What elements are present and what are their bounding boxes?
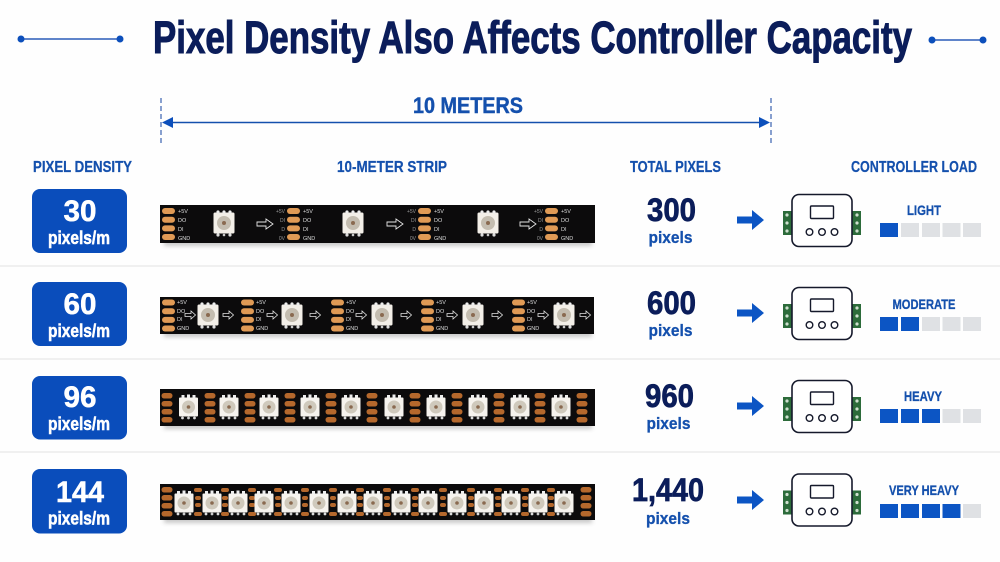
soft shadows under strips [164, 238, 592, 523]
load meter: moderate: MODERATE [892, 297, 956, 312]
LED strip: 60 pixels/m: DI [256, 317, 262, 323]
LED strip: 60 pixels/m: DO [527, 309, 536, 315]
total pixels: 600: 600 [647, 285, 696, 321]
LED strip: 60 pixels/m: DI [527, 317, 533, 323]
badge: 96 pixels/m: pixels/m [48, 414, 110, 434]
total pixels: 600: pixels [648, 321, 692, 340]
LED strip: 60 pixels/m [160, 297, 594, 334]
LED strip: 60 pixels/m: +5V [256, 300, 266, 306]
LED strip: 30 pixels/m: +5V [434, 209, 444, 215]
load meter: moderate [880, 297, 981, 331]
LED strip: 60 pixels/m: DO [177, 309, 186, 315]
load meter: light: LIGHT [907, 203, 942, 218]
LED strip: 96 pixels/m [160, 389, 595, 426]
LED strip: 60 pixels/m: GND [346, 326, 358, 332]
badge: 96 pixels/m: 96 [64, 381, 96, 414]
LED strip: 30 pixels/m: DI [538, 218, 543, 224]
load meter: heavy [880, 389, 981, 423]
badge: 30 pixels/m: 30 [64, 195, 96, 228]
total pixels: 960 [645, 378, 694, 433]
total pixels: 300: 300 [647, 192, 696, 228]
right title ornament [928, 36, 986, 44]
arrow and controller: row 2 [737, 288, 861, 340]
badge: 60 pixels/m: pixels/m [48, 321, 110, 341]
LED strip: 30 pixels/m: DI [303, 227, 309, 233]
LED strip: 30 pixels/m: D [281, 227, 285, 233]
LED strip: 30 pixels/m: +5V [276, 209, 286, 215]
LED strip: 60 pixels/m: GND [177, 326, 189, 332]
LED strip: 30 pixels/m [160, 205, 595, 243]
LED strip: 30 pixels/m: DI [280, 218, 285, 224]
LED strip: 30 pixels/m: D [412, 227, 416, 233]
badge: 60 pixels/m: 60 [64, 288, 96, 321]
10 meters dimension marker [161, 93, 771, 146]
LED strip: 30 pixels/m: DO [178, 218, 187, 224]
LED strip: 30 pixels/m: DI [561, 227, 567, 233]
arrow and controller: row 4 [737, 474, 861, 526]
LED strip: 60 pixels/m: DI [346, 317, 352, 323]
row dividers [0, 266, 1000, 452]
badge: 144 pixels/m: pixels/m [48, 508, 110, 528]
LED strip: 60 pixels/m: DO [436, 309, 445, 315]
badge: 144 pixels/m [32, 469, 127, 534]
LED strip: 144 pixels/m [160, 484, 595, 520]
left title ornament [18, 36, 124, 42]
total pixels: 960: 960 [645, 378, 694, 414]
total pixels: 300: pixels [648, 228, 692, 247]
LED strip: 60 pixels/m: +5V [346, 300, 356, 306]
load meter: heavy: HEAVY [904, 389, 942, 404]
column heading: total pixels: TOTAL PIXELS [630, 159, 721, 176]
LED strip: 30 pixels/m: D [539, 227, 543, 233]
LED strip: 30 pixels/m: +5V [178, 209, 188, 215]
LED strip: 30 pixels/m: GND [434, 236, 446, 242]
LED strip: 60 pixels/m: DI [177, 317, 183, 323]
LED strip: 60 pixels/m: +5V [177, 300, 187, 306]
LED strip: 30 pixels/m: DI [434, 227, 440, 233]
badge: 30 pixels/m: pixels/m [48, 228, 110, 248]
LED strip: 60 pixels/m: DI [436, 317, 442, 323]
badge: 96 pixels/m [32, 376, 127, 440]
LED strip: 60 pixels/m: DO [256, 309, 265, 315]
total pixels: 960: pixels [646, 414, 690, 433]
10 meters dimension marker: 10 METERS [413, 93, 523, 118]
LED strip: 60 pixels/m: +5V [436, 300, 446, 306]
LED strip: 30 pixels/m: DO [561, 218, 570, 224]
arrow and controller: row 1 [737, 194, 861, 246]
LED strip: 60 pixels/m: GND [436, 326, 448, 332]
LED strip: 30 pixels/m: GND [178, 236, 190, 242]
total pixels: 1,440: pixels [646, 509, 690, 528]
LED strip: 60 pixels/m: GND [527, 326, 539, 332]
badge: 30 pixels/m [32, 189, 127, 253]
total pixels: 300 [647, 192, 696, 247]
LED strip: 60 pixels/m: DO [346, 309, 355, 315]
LED strip: 30 pixels/m: 0V [537, 236, 544, 242]
load meter: very heavy [880, 483, 981, 518]
LED strip: 30 pixels/m: 0V [279, 236, 286, 242]
LED strip: 30 pixels/m: DI [178, 227, 184, 233]
LED strip: 60 pixels/m: GND [256, 326, 268, 332]
LED strip: 30 pixels/m: +5V [407, 209, 417, 215]
LED strip: 30 pixels/m: GND [303, 236, 315, 242]
column heading: pixel density: PIXEL DENSITY [33, 159, 132, 176]
column heading: 10-meter strip: 10-METER STRIP [337, 159, 447, 176]
load meter: light [880, 203, 981, 237]
LED strip: 60 pixels/m: +5V [527, 300, 537, 306]
arrow and controller: row 3 [737, 380, 861, 432]
LED strip: 30 pixels/m: +5V [303, 209, 313, 215]
LED strip: 30 pixels/m: +5V [534, 209, 544, 215]
total pixels: 1,440 [632, 472, 704, 528]
total pixels: 1,440: 1,440 [632, 472, 704, 508]
badge: 60 pixels/m [32, 282, 127, 346]
LED strip: 30 pixels/m: GND [561, 236, 573, 242]
LED strip: 30 pixels/m: +5V [561, 209, 571, 215]
load meter: very heavy: VERY HEAVY [889, 483, 959, 498]
LED strip: 30 pixels/m: DO [303, 218, 312, 224]
LED strip: 30 pixels/m: DO [434, 218, 443, 224]
badge: 144 pixels/m: 144 [56, 476, 104, 509]
LED strip: 30 pixels/m: DI [411, 218, 416, 224]
LED strip: 30 pixels/m: 0V [410, 236, 417, 242]
total pixels: 600 [647, 285, 696, 340]
